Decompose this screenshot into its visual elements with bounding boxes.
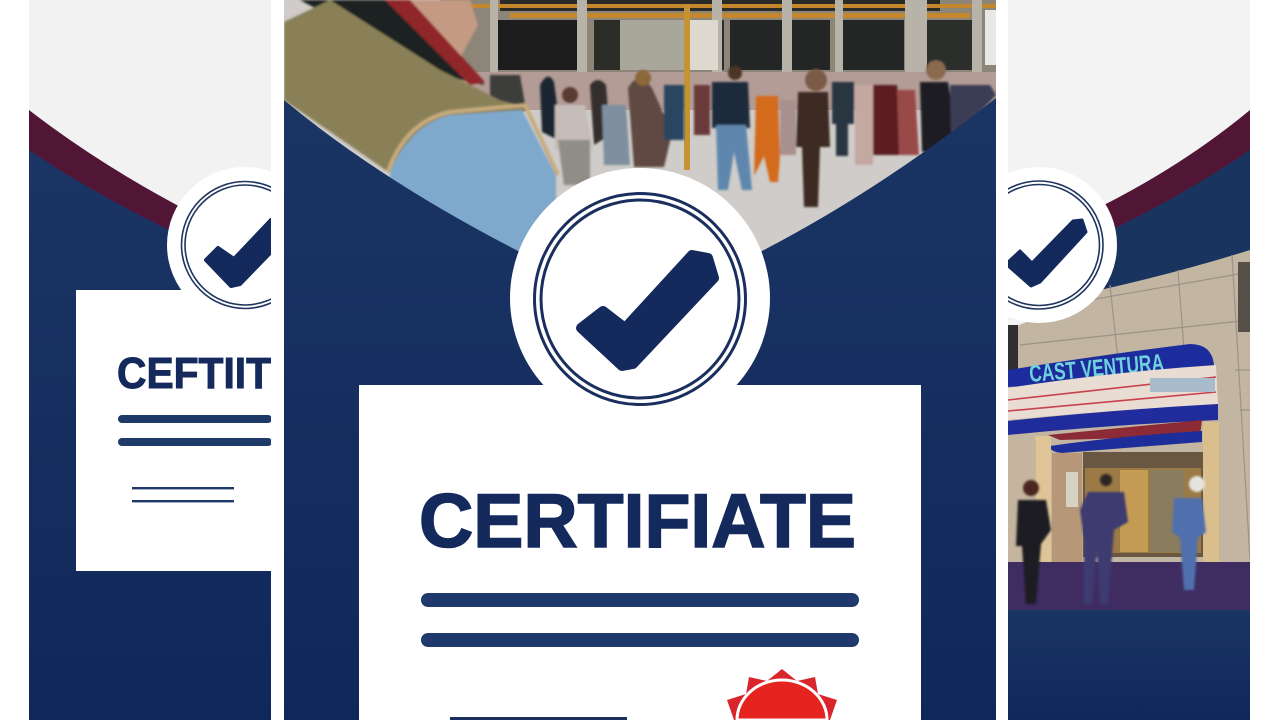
badge circle	[1008, 167, 1117, 323]
badge rings	[534, 194, 746, 404]
badge rings	[180, 180, 271, 310]
panel: centre certificate banner	[284, 0, 996, 720]
icon: check mark	[581, 255, 714, 366]
maroon curved band	[29, 110, 178, 230]
certificate heading: CEFTIIT	[117, 349, 271, 398]
maroon curved band	[1105, 110, 1250, 228]
photo: crowd in front of building	[284, 0, 996, 260]
icon: red seal	[727, 669, 837, 720]
certificate heading: CERTIFIATE	[419, 479, 856, 564]
icon: check mark	[1006, 220, 1086, 286]
people	[1016, 474, 1206, 604]
navy background with curved cut-out	[284, 98, 996, 720]
text lines	[421, 593, 859, 647]
navy background	[29, 150, 271, 720]
photo: theatre entrance: CAST VENTURA	[1028, 349, 1165, 388]
entrance	[1083, 452, 1203, 557]
crowd figures	[490, 60, 996, 207]
certificate card	[359, 385, 921, 720]
foreground person	[284, 0, 558, 255]
navy corner	[1103, 150, 1250, 290]
marquee	[1008, 344, 1214, 387]
badge circle	[167, 167, 271, 290]
photo: theatre entrance	[1008, 250, 1250, 610]
signature line	[450, 717, 627, 720]
sidewalk	[1008, 562, 1250, 610]
navy footer strip	[1008, 610, 1250, 720]
panel: right certificate banner	[1008, 0, 1250, 720]
text lines	[118, 415, 272, 502]
badge circle	[510, 168, 770, 385]
certificate card	[76, 290, 272, 571]
icon: check mark	[206, 220, 271, 286]
panel: left certificate banner	[29, 0, 271, 720]
